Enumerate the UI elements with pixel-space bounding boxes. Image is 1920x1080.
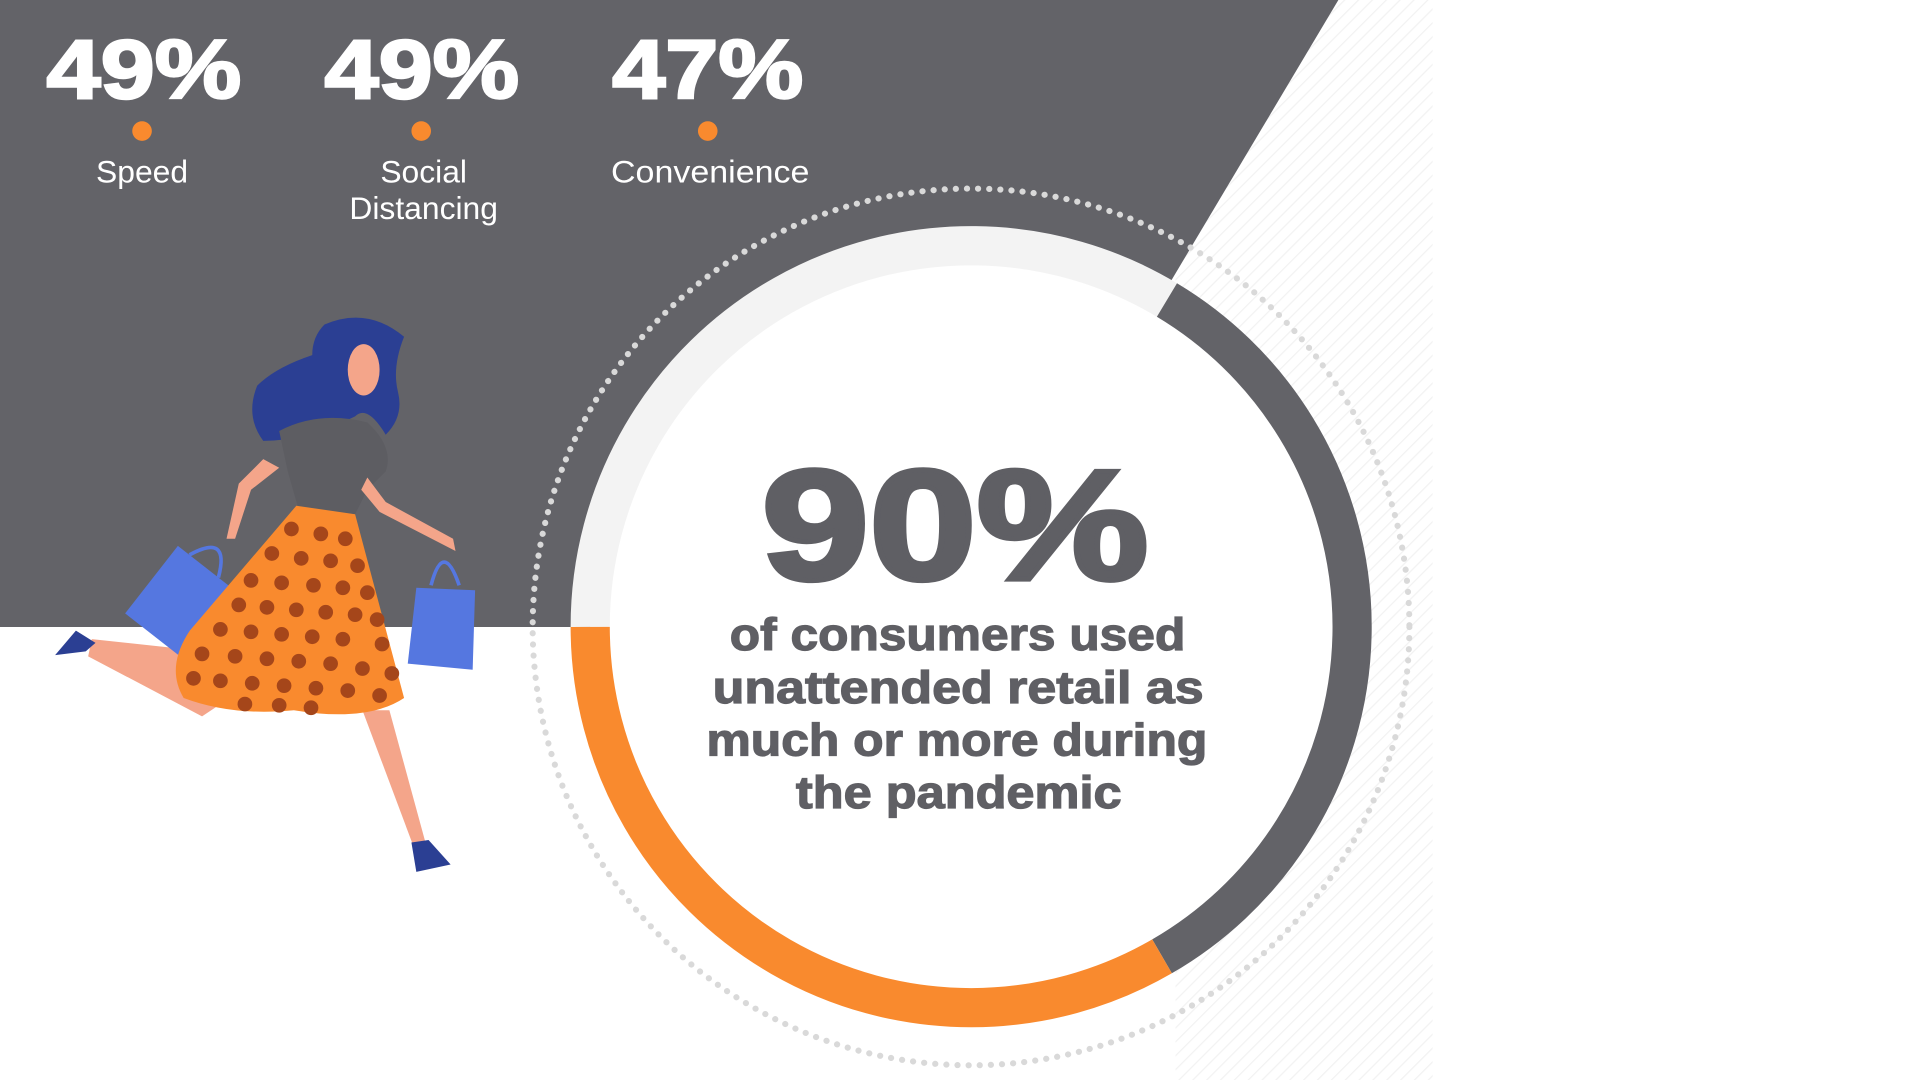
background hatched area [1176, 0, 1433, 1080]
illustration: woman shopping [55, 318, 475, 872]
skirt [176, 506, 404, 714]
stat: speed [47, 23, 241, 189]
right bag [408, 562, 475, 670]
stat: social distancing: Social [380, 153, 467, 189]
stat: convenience [611, 23, 809, 189]
hair [252, 318, 404, 441]
dotted circle [533, 189, 1409, 1065]
donut chart 90% [590, 246, 1352, 1008]
front leg [362, 710, 426, 847]
left bag [125, 529, 244, 655]
stat: social distancing: 49% [324, 23, 519, 116]
stat: speed: Speed [96, 153, 188, 189]
central stat text: of consumers used [730, 609, 1185, 660]
central stat text: the pandemic [796, 767, 1122, 818]
central stat text: much or more during [707, 715, 1207, 766]
back leg [88, 639, 220, 716]
central stat text [707, 438, 1207, 818]
dark gray background panel [0, 0, 1338, 627]
central stat text: 90% [762, 438, 1149, 613]
stat: social distancing: Distancing [349, 190, 498, 226]
arms [227, 459, 279, 539]
face [348, 344, 380, 396]
stat: social distancing [324, 23, 519, 226]
stat: convenience: 47% [612, 23, 803, 116]
central stat text: unattended retail as [713, 662, 1204, 713]
stat: speed: 49% [47, 23, 241, 116]
stat: convenience: Convenience [611, 153, 809, 189]
torso [279, 418, 388, 514]
